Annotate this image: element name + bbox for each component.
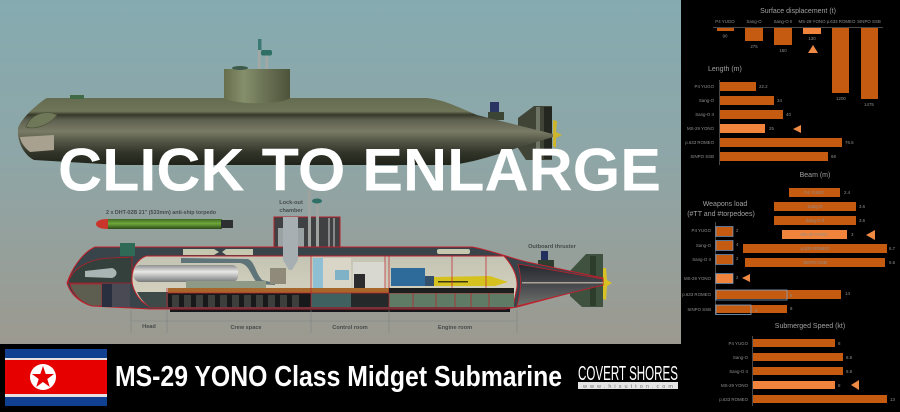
chart: surface displacement: 130 xyxy=(808,36,816,41)
chart: weapons load: Sang-O xyxy=(696,243,712,248)
chart: weapons load: 14 xyxy=(845,291,850,296)
chart: length: SINPO SSB xyxy=(690,154,714,159)
chart: surface displacement: 90 xyxy=(723,34,728,38)
chart: submerged speed: P4 YUGO xyxy=(729,341,749,346)
chart: weapons load: p.633 ROMEO xyxy=(682,292,712,297)
chart: length: P4 YUGO xyxy=(695,84,715,89)
outboard thruster label: Outboard thruster xyxy=(528,244,577,250)
chart: surface displacement: Surface displacement (t) xyxy=(760,8,836,15)
chart: submerged speed: 8.8 xyxy=(846,369,853,374)
logo: Covert Shores: www.hisutton.com xyxy=(582,384,673,390)
background panel xyxy=(0,0,681,344)
chart: submerged speed: MS-29 YONO xyxy=(721,383,749,388)
chart: beam: 3.6 xyxy=(859,204,866,209)
chart: beam: 3 xyxy=(851,232,854,237)
torpedo nose xyxy=(96,219,108,229)
lower tanks xyxy=(167,256,514,307)
chart: weapons load: SINPO SSB xyxy=(687,307,711,312)
chart: beam: Sang-O xyxy=(807,204,823,209)
compartment scale xyxy=(131,310,517,333)
chart: surface displacement: MS-29 YONO xyxy=(798,19,826,24)
sail xyxy=(224,69,290,103)
crew space equipment xyxy=(134,258,286,288)
tail section xyxy=(517,264,603,306)
chart: weapons load: 8 xyxy=(790,293,793,298)
chart: weapons load: 2 xyxy=(736,256,739,261)
label: engine room: Engine room xyxy=(438,325,472,331)
chart: surface displacement: Sang-O II xyxy=(774,19,792,24)
chart: beam: 6.7 xyxy=(889,246,896,251)
chart: length: 34 xyxy=(777,98,782,103)
casing tanks xyxy=(183,249,470,255)
chart: submerged speed xyxy=(719,323,895,406)
sail hatch xyxy=(232,66,248,70)
chart: beam xyxy=(743,172,896,267)
chart: length: Sang-O xyxy=(699,98,715,103)
tail fins and propeller xyxy=(570,254,612,307)
lock-out chamber label line 2: chamber xyxy=(279,208,303,214)
chart: weapons load xyxy=(682,201,850,315)
chart: surface displacement: Sang-O xyxy=(746,19,762,24)
chart: beam: Beam (m) xyxy=(800,172,830,179)
chart: weapons load: 2 xyxy=(736,228,739,233)
bow compartments xyxy=(68,257,132,307)
outer hull xyxy=(67,247,603,309)
chart: length: 76.6 xyxy=(845,140,854,145)
bow sonar window xyxy=(20,135,54,152)
chart: beam: 3.6 xyxy=(859,218,866,223)
lock-out chamber xyxy=(283,217,298,270)
chart: surface displacement: 1200 xyxy=(836,96,846,101)
chart: weapons load: Weapons load xyxy=(703,201,747,208)
torpedo label: 2 x DHT-02B 21" (533mm) anti-ship torpedo xyxy=(106,210,217,216)
chart: submerged speed: 13 xyxy=(890,397,895,402)
chart: submerged speed: Submerged Speed (kt) xyxy=(775,323,845,330)
control room equipment xyxy=(313,258,385,288)
keel shadow xyxy=(170,308,510,312)
chart: weapons load: 8 xyxy=(790,306,793,311)
chart: length xyxy=(685,66,854,165)
chart: weapons load: 4 xyxy=(755,308,758,313)
label: control room: Control room xyxy=(332,325,368,331)
forward lower compartment xyxy=(137,292,168,307)
flag of North Korea xyxy=(5,349,107,406)
chart: surface displacement: 275 xyxy=(750,44,758,49)
forward hatch xyxy=(120,243,135,256)
periscope masts xyxy=(258,39,272,70)
chart: beam: 2.4 xyxy=(844,190,851,195)
chart: beam: SINPO SSB xyxy=(803,260,827,265)
label: head: Head xyxy=(142,324,156,330)
chart: length: Sang-O II xyxy=(695,112,714,117)
chart: weapons load: (#TT and #torpedoes) xyxy=(687,211,755,218)
chart: beam: 6.5 xyxy=(889,260,896,265)
chart: weapons load: P4 YUGO xyxy=(692,228,712,233)
chart: surface displacement: P4 YUGO xyxy=(715,19,735,24)
chart: surface displacement: p.633 ROMEO xyxy=(827,19,856,24)
logo: Covert Shores: COVERT SHORES xyxy=(578,363,678,385)
chart: submerged speed: Sang-O II xyxy=(729,369,748,374)
sail section xyxy=(274,190,340,248)
chart: length: 40 xyxy=(786,112,791,117)
chart: length: 22.2 xyxy=(759,84,768,89)
chart: weapons load: Sang-O II xyxy=(692,257,711,262)
main title: MS-29 YONO Class Midget Submarine xyxy=(115,361,562,393)
tail shaft xyxy=(522,282,603,284)
chart: submerged speed: 8 xyxy=(838,341,841,346)
chart: surface displacement xyxy=(713,8,883,107)
cutaway submarine xyxy=(67,190,612,312)
thruster on deck xyxy=(488,102,504,120)
chart: weapons load: 4 xyxy=(736,242,739,247)
chart: surface displacement: 1475 xyxy=(864,102,874,107)
chart: surface displacement: 150 xyxy=(779,48,787,53)
bow dome xyxy=(26,113,57,128)
hull xyxy=(18,98,553,165)
chart: length: 68 xyxy=(831,154,836,159)
lock-out chamber label: Lock-out xyxy=(279,200,303,206)
forward hatch xyxy=(70,95,84,99)
chart: length: MS-29 YONO xyxy=(687,126,715,131)
torpedo body xyxy=(107,219,222,229)
battery bank xyxy=(168,293,311,307)
chart: length: Length (m) xyxy=(708,66,742,73)
chart: submerged speed: 8 xyxy=(838,383,841,388)
chart: length: 25 xyxy=(769,126,774,131)
chart: beam: Sang-O II xyxy=(806,218,824,223)
right statistics panel xyxy=(681,0,900,412)
deck plate xyxy=(168,288,390,293)
logo: Covert Shores xyxy=(578,363,678,390)
exterior submarine side view xyxy=(18,39,562,165)
footer band xyxy=(0,344,681,412)
torpedo xyxy=(96,210,233,229)
chart: surface displacement: SINPO SSB xyxy=(857,19,881,24)
chart: submerged speed: p.633 ROMEO xyxy=(719,397,749,402)
torpedo tail xyxy=(221,220,233,228)
engine room machinery xyxy=(391,268,508,286)
click to enlarge overlay: CLICK TO ENLARGE xyxy=(58,136,661,204)
tail fins xyxy=(518,106,562,160)
chart: beam: p.633 ROMEO xyxy=(801,246,830,251)
chart: submerged speed: Sang-O xyxy=(733,355,749,360)
chart: weapons load: MS-29 YONO xyxy=(684,276,712,281)
chart: weapons load: 2 xyxy=(736,275,739,280)
chart: length: p.633 ROMEO xyxy=(685,140,715,145)
chart: beam: P4 YUGO xyxy=(804,190,824,195)
pressure hull interior xyxy=(132,256,517,307)
chart: beam: MS-29 YONO xyxy=(800,232,828,237)
outboard thruster xyxy=(538,251,554,269)
chart: submerged speed: 8.8 xyxy=(846,355,853,360)
label: crew space: Crew space xyxy=(230,325,262,331)
